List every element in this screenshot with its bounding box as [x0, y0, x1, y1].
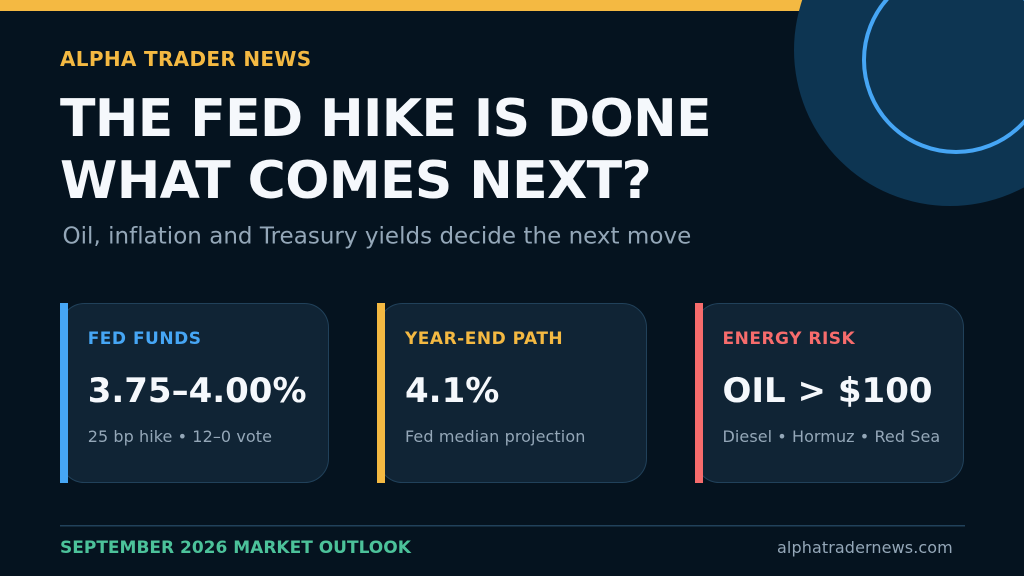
decorative ring	[864, 0, 1024, 152]
panel: year-end path	[377, 303, 646, 483]
panel: energy risk	[695, 303, 964, 483]
footer left label: SEPTEMBER 2026 MARKET OUTLOOK	[60, 538, 412, 558]
title	[60, 89, 711, 211]
panel: year-end path: Fed median projection	[405, 427, 585, 446]
panel: fed funds: FED FUNDS	[88, 329, 201, 349]
subtitle: Oil, inflation and Treasury yields decide the next move	[62, 224, 691, 250]
panel: energy risk: ENERGY RISK	[722, 329, 856, 349]
panel: energy risk: Diesel • Hormuz • Red Sea	[722, 427, 940, 446]
panel: fed funds	[60, 303, 328, 483]
panel: fed funds: 3.75–4.00%	[88, 371, 307, 411]
panel: fed funds: 25 bp hike • 12–0 vote	[88, 427, 272, 446]
decorative circle	[794, 0, 1024, 206]
top accent bar	[0, 0, 820, 11]
title: THE FED HIKE IS DONE	[60, 89, 711, 149]
panel: year-end path: 4.1%	[405, 371, 499, 411]
panel: year-end path: YEAR-END PATH	[404, 329, 563, 349]
brand label: ALPHA TRADER NEWS	[60, 47, 312, 71]
title: WHAT COMES NEXT?	[60, 151, 651, 211]
panel: energy risk: OIL > $100	[722, 371, 933, 411]
footer url: alphatradernews.com	[777, 538, 953, 557]
